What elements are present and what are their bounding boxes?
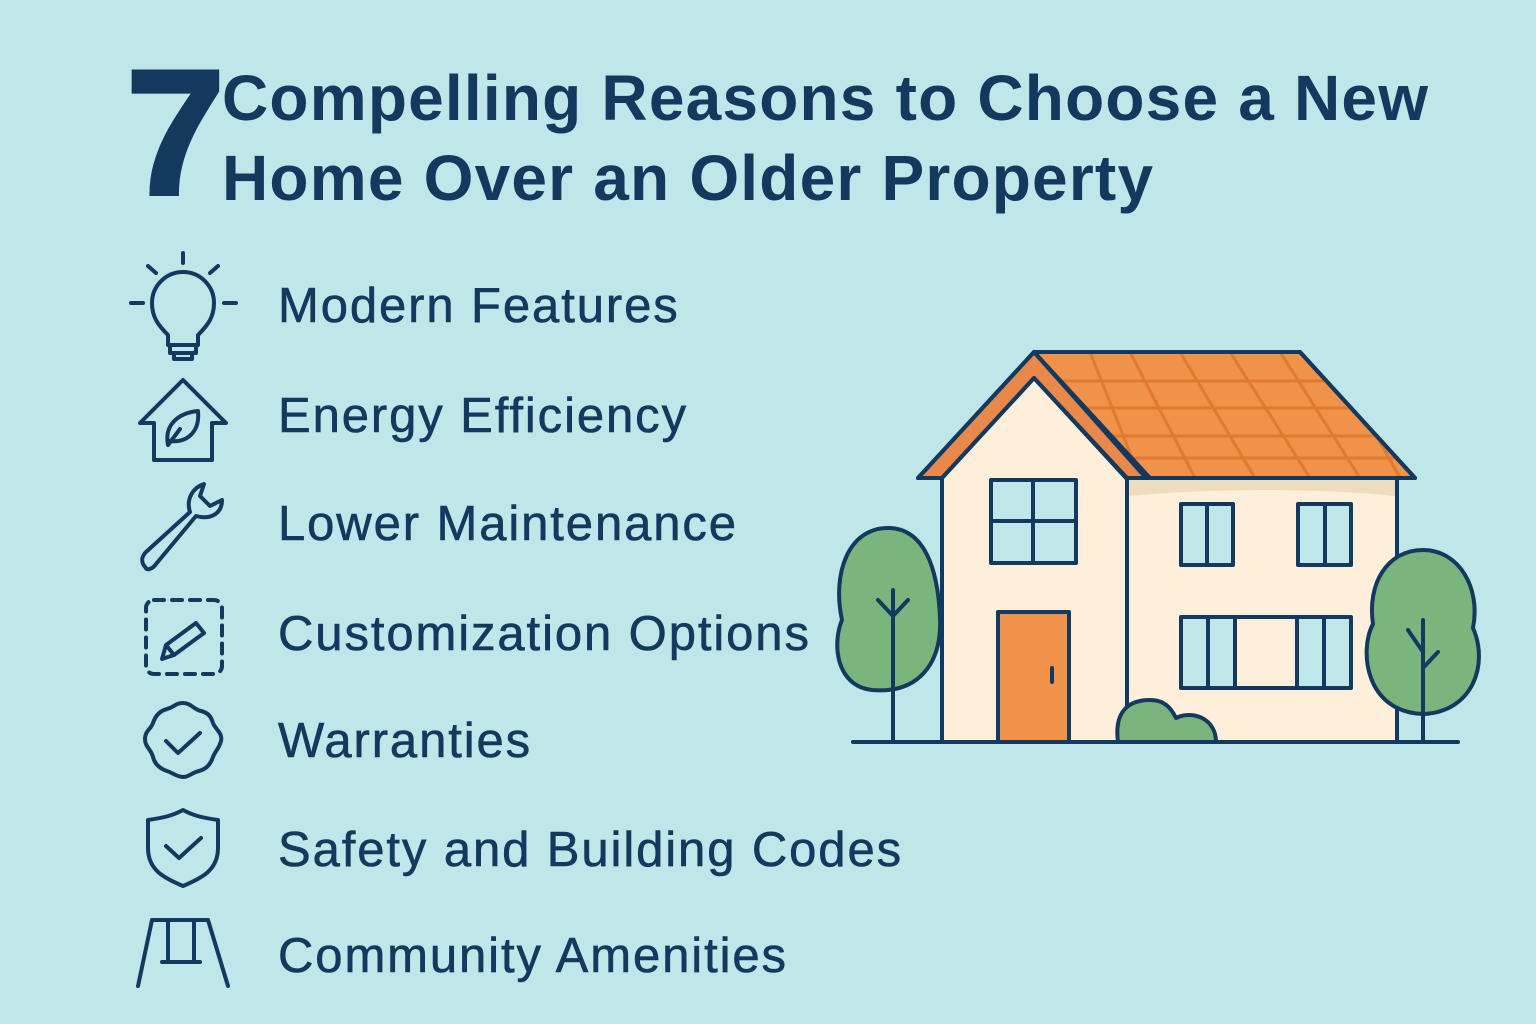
icon: pencil dashed	[146, 600, 222, 674]
icon: wrench	[142, 484, 222, 569]
title number: 7	[126, 33, 225, 232]
right block wall	[1127, 478, 1397, 742]
icon: shield check	[148, 810, 218, 886]
windows	[991, 480, 1351, 688]
tree left	[837, 528, 940, 742]
bush	[1117, 700, 1216, 742]
icon: house leaf	[140, 380, 226, 460]
item: safety: Safety and Building Codes	[278, 823, 903, 877]
icon: lightbulb	[131, 253, 236, 359]
tree right	[1367, 550, 1479, 742]
item: energy efficiency: Energy Efficiency	[278, 389, 688, 443]
item: customization: Customization Options	[278, 607, 811, 661]
title: Compelling Reasons to Choose a New	[222, 62, 1429, 134]
item: community: Community Amenities	[278, 929, 788, 983]
item: lower maintenance: Lower Maintenance	[278, 497, 738, 551]
door	[998, 612, 1069, 742]
house illustration	[837, 352, 1479, 742]
gable	[918, 352, 1150, 478]
roof	[1034, 352, 1415, 478]
icon: badge check	[145, 703, 221, 777]
item: modern features: Modern Features	[278, 279, 680, 333]
title: Home Over an Older Property	[222, 142, 1154, 214]
icon: swing	[138, 920, 228, 986]
title	[222, 62, 1429, 214]
item: warranties: Warranties	[278, 714, 532, 768]
icons and house	[129, 251, 1481, 988]
ground	[853, 740, 1458, 744]
